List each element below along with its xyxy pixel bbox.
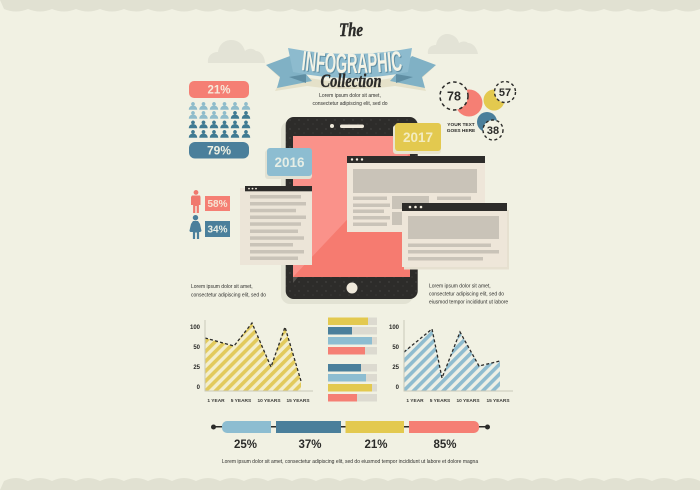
tag: 2017: 2017 [403, 130, 433, 145]
ribbon right fold [396, 74, 413, 83]
tag: 2016: 2016 [274, 155, 305, 170]
circle caption [447, 122, 476, 134]
home button [346, 282, 358, 294]
x axis labels: 10 YEARS [456, 398, 480, 404]
x axis labels [207, 398, 310, 404]
y axis labels [190, 325, 201, 391]
dashed line [205, 323, 301, 381]
window text lines [250, 195, 306, 260]
y axis labels: 25 [392, 365, 400, 371]
y axis labels: 25 [193, 365, 201, 371]
window title bar [347, 156, 485, 163]
timeline bar [211, 421, 490, 451]
circle: 57: 57 [499, 87, 511, 99]
tablet [281, 117, 418, 304]
text block: left: Lorem ipsum dolor sit amet, [191, 284, 253, 290]
x axis labels: 1 YEAR [406, 398, 424, 404]
panel: circle statistics [440, 82, 516, 140]
x axis labels: 1 YEAR [207, 398, 225, 404]
y axis labels: 50 [392, 345, 400, 351]
timeline values [234, 439, 457, 451]
people icon grid [189, 102, 250, 138]
window title bar [245, 186, 312, 191]
heading: The: The [339, 20, 363, 41]
screen highlight [293, 136, 410, 277]
text block: left [191, 284, 266, 298]
tablet screen [293, 136, 410, 277]
window content [408, 216, 499, 260]
area fill [205, 323, 301, 391]
chart: blue area [389, 320, 513, 404]
tablet body [286, 117, 418, 299]
y axis labels: 100 [389, 325, 400, 331]
timeline values: 25% [234, 439, 257, 451]
y axis labels: 0 [197, 385, 201, 391]
axes [205, 320, 313, 391]
x axis labels: 15 YEARS [286, 398, 310, 404]
speaker [330, 124, 364, 128]
axes [404, 320, 513, 391]
ribbon right tail [390, 56, 436, 88]
panel: people statistic [189, 81, 250, 158]
tag: 2016 [265, 148, 312, 179]
cloud: left [208, 40, 265, 63]
ribbon title text shadow: INFOGRAPHIC [303, 52, 403, 74]
bezel glare [293, 277, 298, 283]
text block: left: consectetur adipiscing elit, sed do [191, 292, 266, 298]
ribbon left fold [289, 74, 306, 83]
tag: 2017 [393, 123, 441, 154]
window body [347, 161, 485, 232]
timeline values: 21% [364, 439, 388, 451]
cloud: right [428, 34, 478, 54]
title ribbon [266, 48, 436, 91]
79% pill: 79% [207, 144, 231, 158]
icon: woman [189, 215, 202, 239]
window body [402, 209, 507, 267]
y axis labels: 0 [396, 385, 400, 391]
text block: right: Lorem ipsum dolor sit amet, [429, 284, 491, 290]
x axis labels: 15 YEARS [486, 398, 510, 404]
window: front right [402, 203, 509, 270]
segment 85% [409, 421, 479, 433]
chart: yellow area [190, 320, 313, 404]
window: middle [347, 156, 485, 232]
bottom scalloped border [0, 478, 700, 490]
x axis labels: 5 YEARS [231, 398, 252, 404]
panel: gender statistic [189, 190, 230, 239]
area fill [404, 329, 500, 391]
x axis labels [406, 398, 510, 404]
y axis labels: 100 [190, 325, 201, 331]
bar tracks [328, 318, 377, 402]
window body [240, 188, 312, 265]
circle caption: GOES HERE [447, 128, 476, 134]
ribbon left tail [266, 56, 312, 88]
y axis labels: 50 [193, 345, 201, 351]
timeline axis [211, 424, 490, 430]
heading: Collection: Collection [320, 71, 382, 92]
window content [353, 169, 477, 226]
intro text: Lorem ipsum dolor sit amet, [319, 93, 381, 99]
y axis labels [389, 325, 400, 391]
text block: right: eiusmod tempor incididunt ut labore [429, 300, 508, 306]
bar values [328, 318, 372, 402]
window title bar [402, 203, 507, 211]
timeline values: 37% [298, 439, 322, 451]
58% box: 58% [207, 199, 228, 210]
text block: right [429, 284, 508, 306]
intro text: consectetur adipiscing elit, sed do [312, 101, 388, 107]
ribbon band [288, 48, 412, 78]
segment 25% [222, 421, 271, 433]
top scalloped border [0, 0, 700, 12]
icon: man [191, 190, 200, 213]
text block: right: consectetur adipiscing elit, sed do [429, 292, 504, 298]
segment 37% [276, 421, 341, 433]
circle caption: YOUR TEXT [447, 122, 475, 128]
34% box: 34% [207, 224, 228, 236]
footer text: Lorem ipsum dolor sit amet, consectetur adipiscing elit, sed do eiusmod tempor incididunt ut labore et dolore magna [222, 459, 478, 465]
x axis labels: 5 YEARS [430, 398, 451, 404]
ribbon title text: INFOGRAPHIC [302, 51, 402, 74]
intro text [312, 93, 388, 107]
segment 21% [346, 421, 404, 433]
21% pill: 21% [207, 84, 231, 96]
ribbon shadow [268, 59, 434, 91]
chart: horizontal bars [328, 318, 377, 402]
dashed line [404, 329, 500, 378]
window shadow [404, 210, 509, 270]
x axis labels: 10 YEARS [257, 398, 281, 404]
tablet shadow [281, 121, 413, 304]
circle: 78: 78 [447, 90, 461, 104]
window: left [240, 186, 312, 265]
timeline values: 85% [433, 439, 457, 451]
circle: 38: 38 [487, 125, 499, 137]
